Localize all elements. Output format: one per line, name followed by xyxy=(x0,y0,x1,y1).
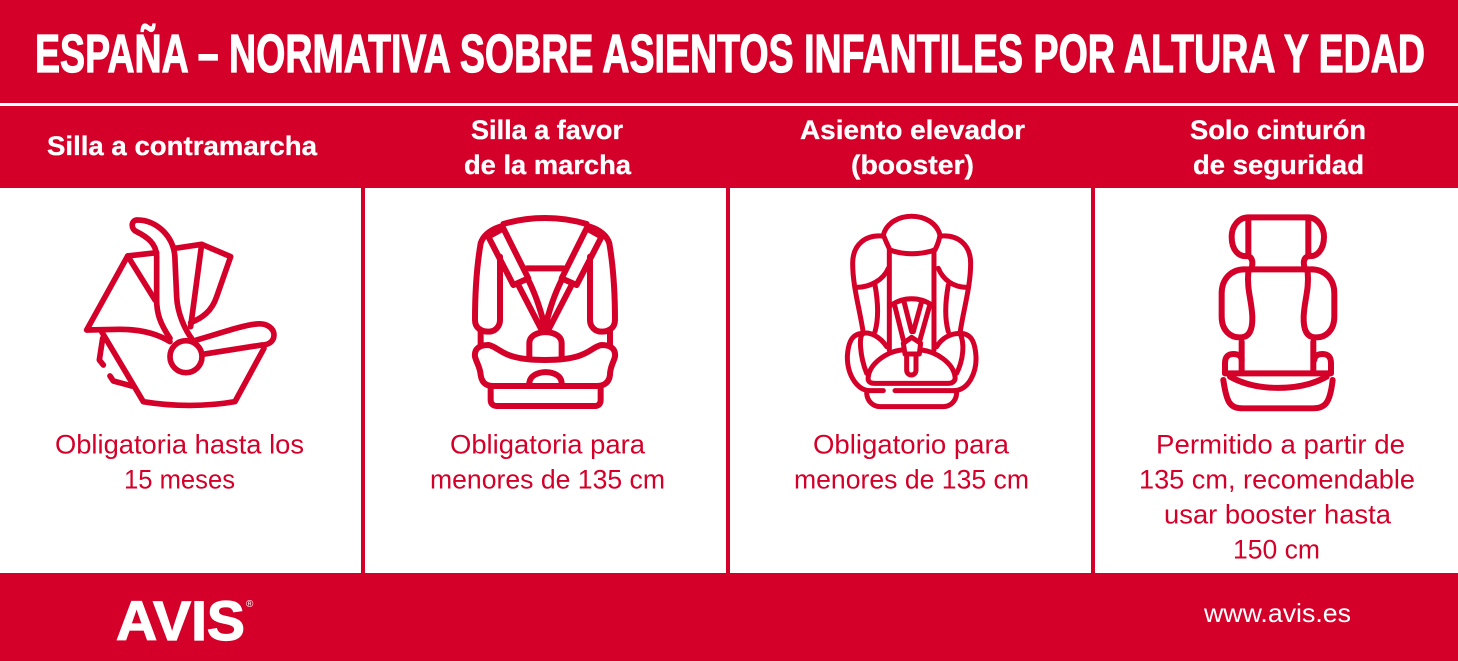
icon: booster seat with harness xyxy=(847,216,976,407)
title banner xyxy=(0,0,1458,103)
panel: asiento elevador xyxy=(794,115,1029,494)
description: asiento elevador xyxy=(794,430,1029,494)
logo: AVIS: AVIS xyxy=(116,589,245,652)
description: asiento elevador: menores de 135 cm xyxy=(794,464,1029,494)
description: silla a favor de la marcha: Obligatoria para xyxy=(450,430,645,460)
description: solo cinturón de seguridad: 135 cm, recomendable xyxy=(1139,464,1415,494)
panel: silla a favor de la marcha xyxy=(430,115,665,494)
description: silla a contramarcha xyxy=(55,430,304,494)
description: solo cinturón de seguridad xyxy=(1139,430,1415,564)
panel: solo cinturón de seguridad xyxy=(1139,115,1415,564)
description: silla a favor de la marcha: menores de 135 cm xyxy=(430,464,665,494)
heading: solo cinturón de seguridad: de seguridad xyxy=(1193,150,1364,180)
heading: silla a favor de la marcha: de la marcha xyxy=(464,150,632,180)
description: solo cinturón de seguridad: usar booster hasta xyxy=(1164,500,1391,530)
heading: silla a contramarcha: Silla a contramarcha xyxy=(47,131,318,161)
logo: AVIS: ® xyxy=(246,599,254,610)
heading: asiento elevador xyxy=(800,115,1025,180)
heading: silla a favor de la marcha xyxy=(464,115,632,180)
description: silla a contramarcha: Obligatoria hasta los xyxy=(55,430,304,460)
footer xyxy=(0,573,1458,661)
icon: backless belt seat xyxy=(1222,217,1334,408)
panel: silla a contramarcha xyxy=(47,131,318,494)
description: asiento elevador: Obligatorio para xyxy=(813,430,1009,460)
description: silla a contramarcha: 15 meses xyxy=(124,464,235,494)
description: silla a favor de la marcha xyxy=(430,430,665,494)
website: www.avis.es xyxy=(1203,598,1351,628)
heading: asiento elevador: Asiento elevador xyxy=(800,115,1025,145)
heading: solo cinturón de seguridad xyxy=(1190,115,1366,180)
description: solo cinturón de seguridad: Permitido a partir de xyxy=(1156,430,1405,460)
heading: asiento elevador: (booster) xyxy=(851,150,974,180)
icon: infant carrier xyxy=(87,220,274,405)
heading: silla a favor de la marcha: Silla a favor xyxy=(471,115,623,145)
icon: forward-facing seat xyxy=(475,218,615,406)
heading: solo cinturón de seguridad: Solo cinturón xyxy=(1190,115,1366,145)
description: solo cinturón de seguridad: 150 cm xyxy=(1233,534,1320,564)
